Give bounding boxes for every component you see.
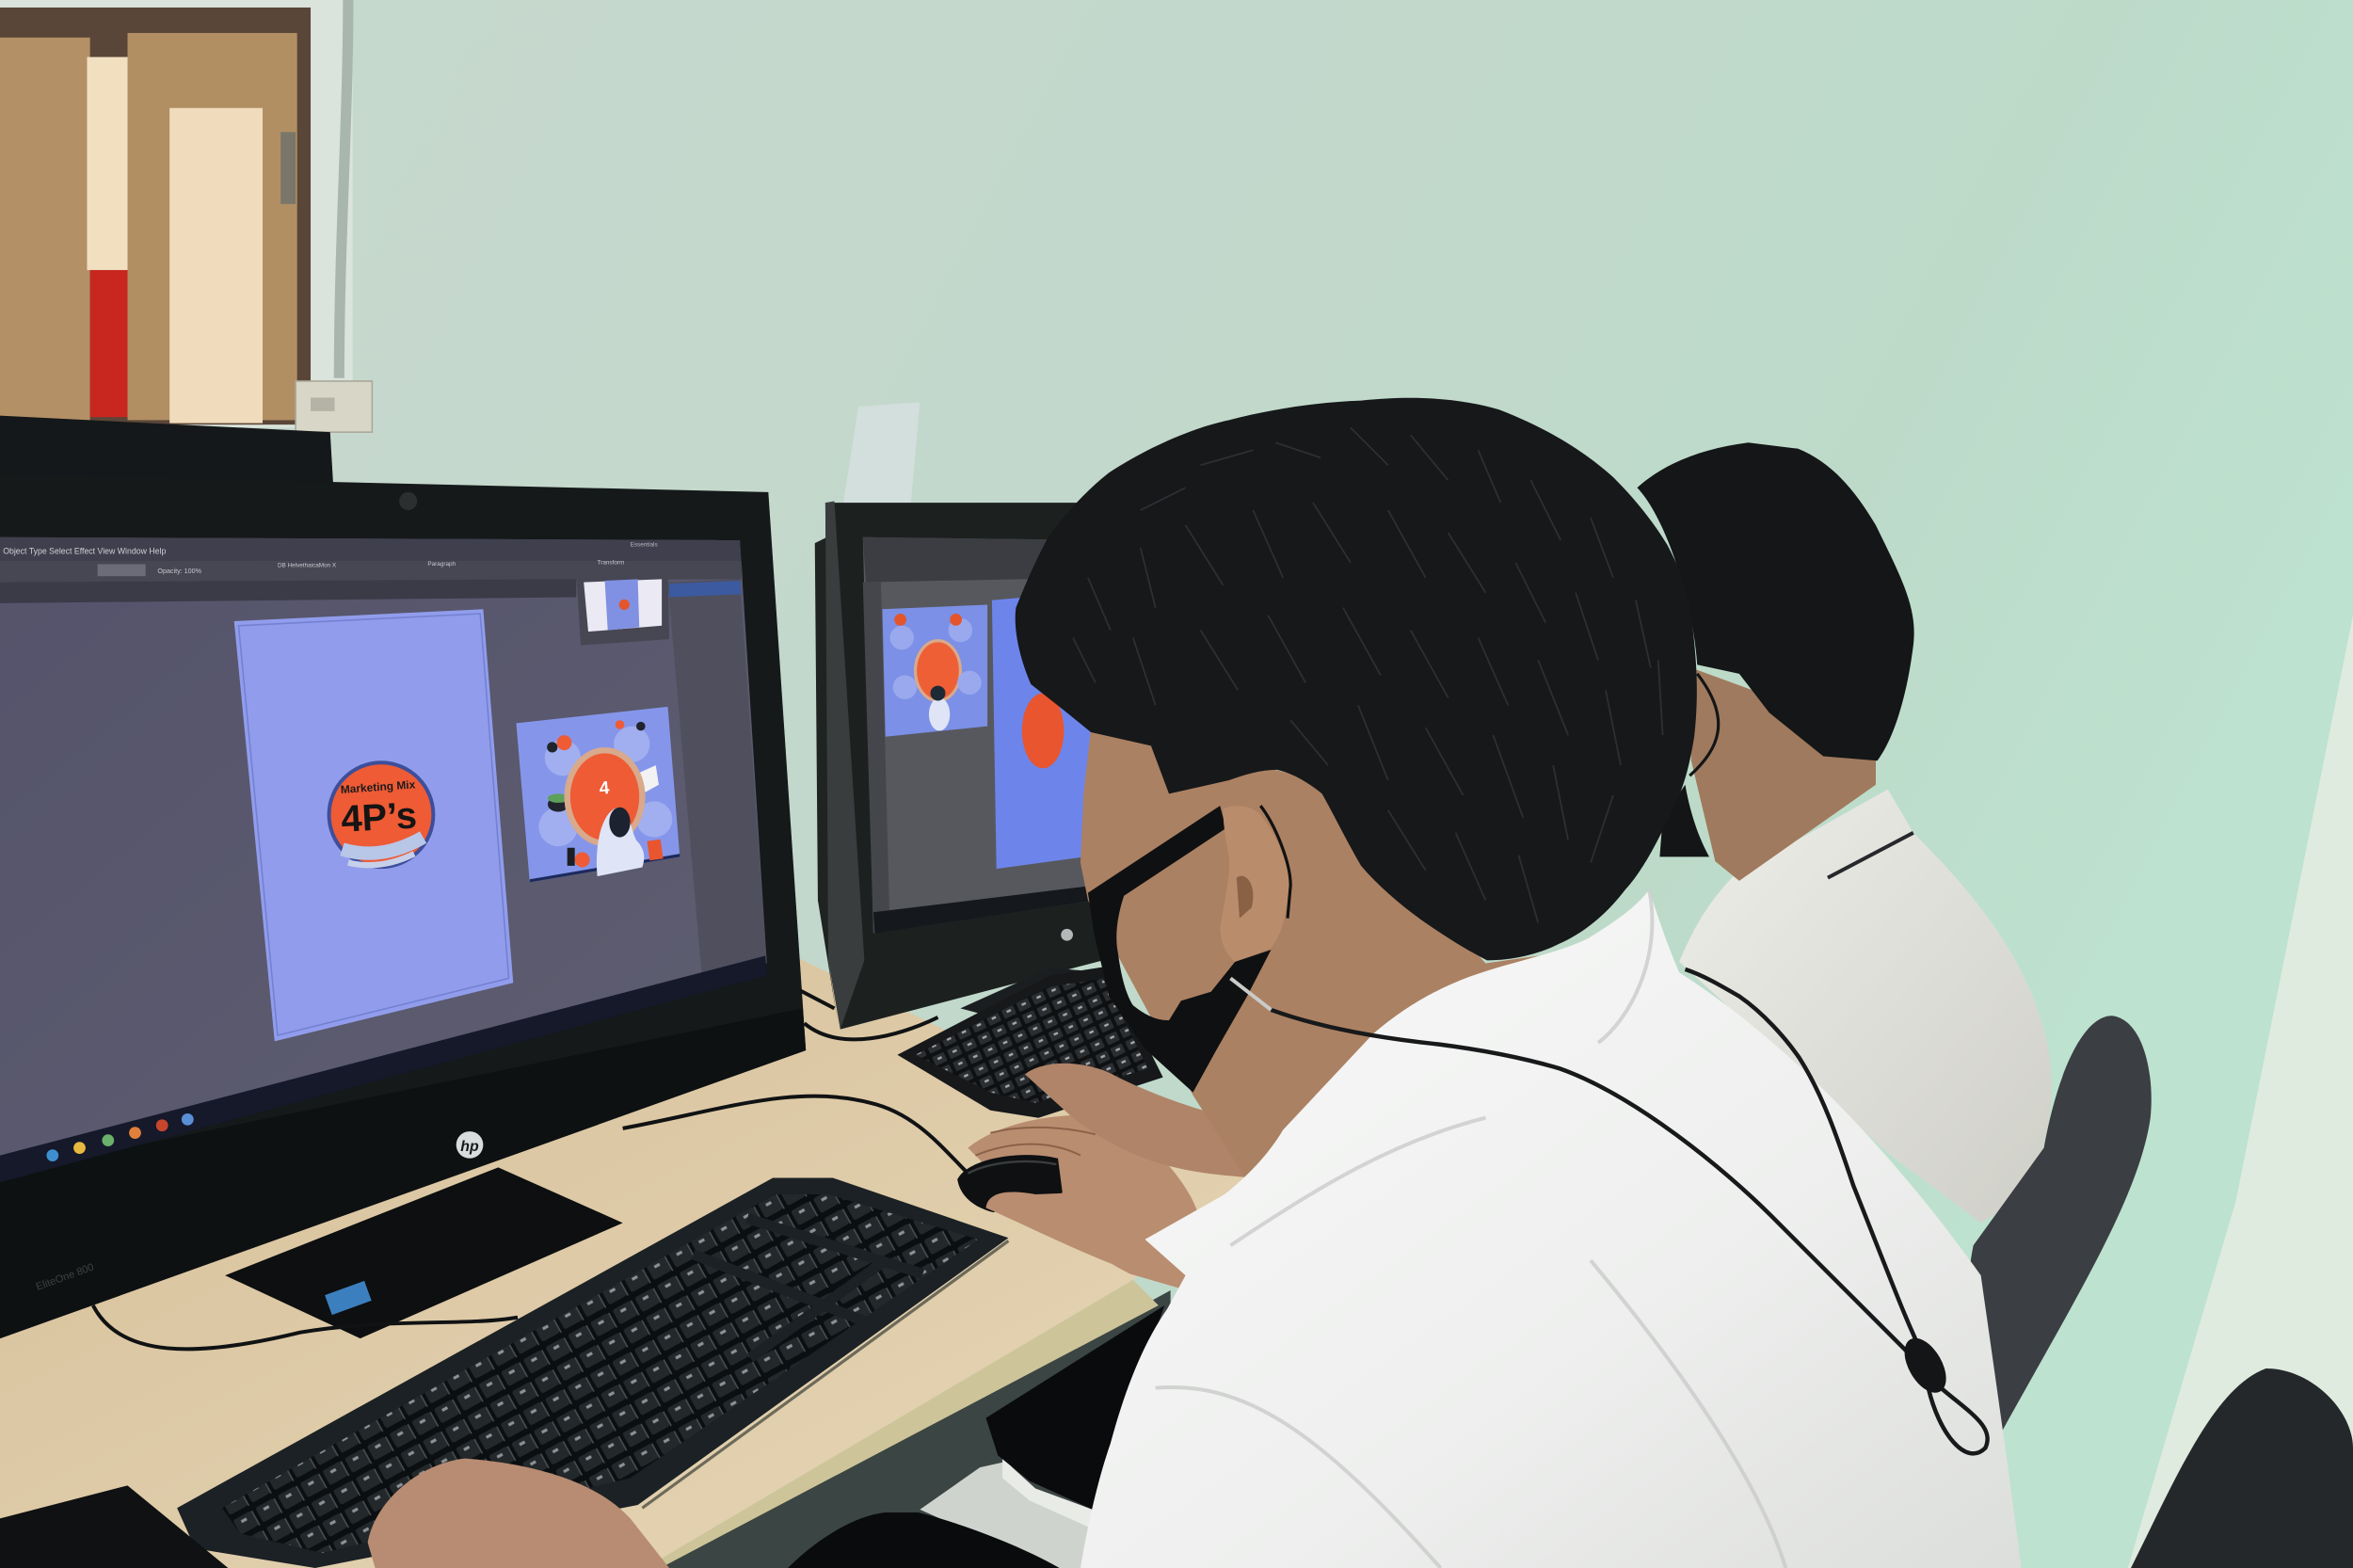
finger lines: [975, 1128, 1096, 1156]
computer mouse: [957, 1155, 1063, 1212]
artboard enlarged 4Ps: [992, 591, 1096, 869]
artboard with infographic: [883, 604, 987, 737]
lanyard: [1271, 969, 1988, 1453]
white paper on wall: [843, 402, 920, 503]
app menu bar: Opacity: 100%: [157, 568, 202, 575]
desk: [0, 952, 1245, 1568]
back person strap: [1828, 833, 1913, 878]
wall socket: [296, 381, 372, 432]
second monitor: [815, 501, 1103, 1030]
4Ps badge: Marketing Mix: [340, 777, 416, 796]
taskbar: [0, 956, 767, 1182]
doorway at top left: [0, 0, 353, 427]
hp logo: hp: [460, 1139, 479, 1155]
chair near back person: [1967, 1016, 2152, 1448]
app menu bar: Transform: [598, 559, 624, 566]
face and neck: [1080, 728, 1591, 1177]
thumb: [986, 1192, 1141, 1268]
back person hair: [1637, 442, 1914, 760]
large artboard: [234, 609, 513, 1041]
first monitor: [0, 474, 806, 1338]
white shirt: [1080, 889, 2022, 1568]
hair: [1016, 398, 1697, 960]
inner ear: [1237, 876, 1253, 919]
app menu bar: Object Type Select Effect View Window Help: [3, 546, 166, 555]
hair highlights: [1073, 427, 1663, 922]
face mask: [1088, 806, 1271, 1093]
monitor behind: [0, 416, 333, 483]
first monitor screen: [0, 537, 767, 1182]
mask strap over ear: [1260, 806, 1290, 919]
back person shirt: [1679, 790, 2052, 1223]
app menu bar: [0, 537, 743, 603]
second monitor logo: [1061, 929, 1073, 941]
hand on second keyboard: [1025, 1064, 1275, 1177]
lanyard toggle: [1896, 1331, 1955, 1400]
chair bottom right: [2131, 1368, 2353, 1568]
app menu bar: Essentials: [631, 541, 658, 548]
4Ps badge: [328, 760, 435, 869]
monitor stand: [225, 1167, 623, 1338]
trouser lap: [788, 1512, 1060, 1568]
model label: EliteOne 800: [35, 1262, 96, 1293]
white wall corner: [2128, 616, 2353, 1568]
main keyboard: [177, 1177, 1008, 1568]
second keyboard: [897, 967, 1163, 1118]
webcam: [399, 492, 417, 510]
4Ps badge: 4P’s: [340, 795, 418, 840]
ear: [1220, 806, 1289, 962]
second monitor base: [960, 968, 1103, 1020]
back person neck: [1691, 667, 1876, 881]
trouser knee: [986, 1305, 1164, 1510]
main person: [1016, 398, 2022, 1568]
monitor cables: [93, 990, 968, 1349]
central orange circle: [564, 747, 646, 846]
layers list: [669, 581, 742, 598]
small infographic artboard: [516, 707, 680, 882]
silver lanyard clip: [1230, 978, 1271, 1010]
back person mask strap: [1689, 674, 1719, 776]
wall conduit pipe: [339, 0, 348, 378]
person in back: [1637, 442, 2052, 1223]
second monitor screen: [863, 537, 1096, 934]
hand on mouse: [968, 1115, 1201, 1290]
app menu bar: DB HelvethaicaMon X: [278, 563, 337, 569]
hp logo: [456, 1131, 483, 1159]
shirt fold shading: [1156, 889, 1785, 1568]
tablet on desk: [0, 1485, 228, 1568]
app menu bar: Paragraph: [427, 561, 456, 568]
back person mask: [1659, 785, 1709, 856]
navigator panel: [576, 570, 669, 646]
central orange circle: 4: [599, 778, 611, 799]
bottom hand on keyboard: [368, 1459, 669, 1568]
area under desk: [661, 1290, 1171, 1568]
